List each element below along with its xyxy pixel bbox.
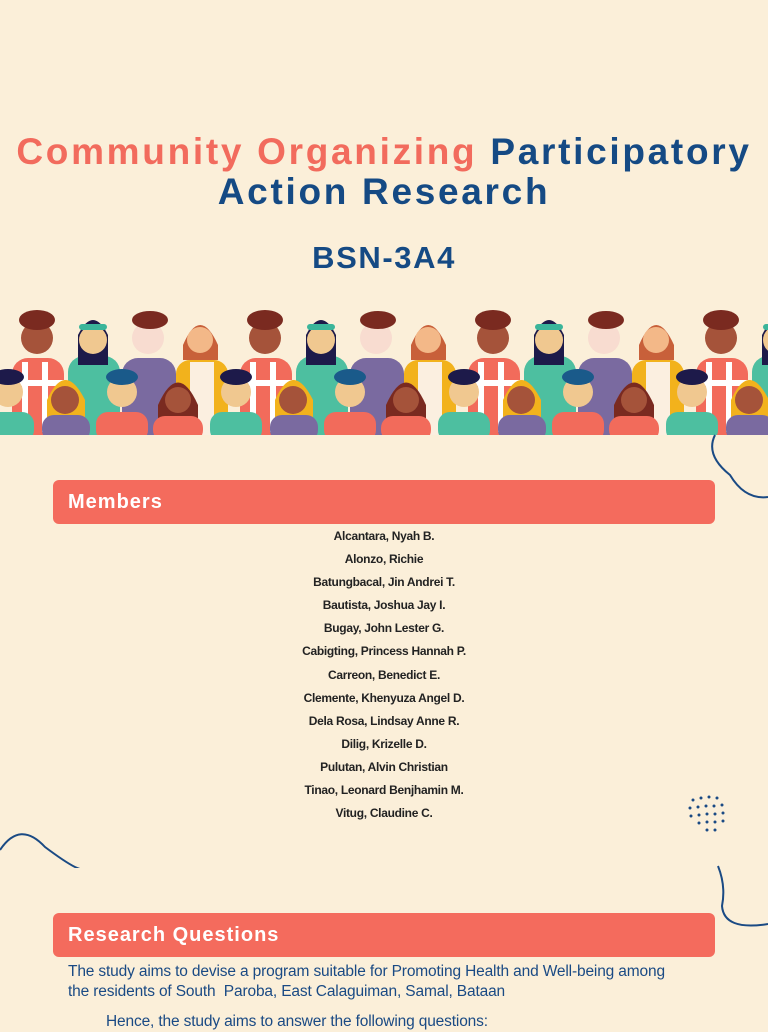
research questions header bar: Research Questions — [68, 924, 279, 946]
research questions text: The study aims to devise a program suitable for Promoting Health and Well-being among — [68, 963, 665, 980]
members list: Tinao, Leonard Benjhamin M. — [304, 783, 464, 797]
members list: Alcantara, Nyah B. — [334, 529, 434, 543]
research questions text: the residents of South Paroba, East Calaguiman, Samal, Bataan — [68, 983, 505, 1000]
decoration: dots — [688, 796, 724, 832]
members list: Alonzo, Richie — [345, 552, 423, 566]
members list: Dela Rosa, Lindsay Anne R. — [309, 714, 459, 728]
members list: Pulutan, Alvin Christian — [320, 760, 448, 774]
title: Community Organizing Participatory — [16, 131, 752, 172]
members list: Vitug, Claudine C. — [335, 806, 433, 820]
illustration: crowd of people — [0, 310, 768, 435]
title: Action Research — [218, 171, 550, 212]
research questions text: Hence, the study aims to answer the following questions: — [106, 1013, 488, 1030]
title — [16, 131, 752, 212]
decoration: wavy line left — [0, 833, 80, 868]
research questions text — [68, 963, 665, 1030]
members list: Cabigting, Princess Hannah P. — [302, 644, 466, 658]
members list: Clemente, Khenyuza Angel D. — [304, 691, 464, 705]
subtitle: class code: BSN-3A4 — [312, 240, 456, 275]
decoration: wavy line right — [717, 866, 768, 926]
members list: Bautista, Joshua Jay I. — [323, 598, 445, 612]
members list: Bugay, John Lester G. — [324, 621, 444, 635]
members list — [302, 529, 466, 820]
decoration: wavy line top right — [711, 434, 768, 498]
research questions header bar — [53, 913, 715, 957]
members header bar — [53, 480, 715, 524]
members header bar: Members — [68, 491, 163, 513]
members list: Batungbacal, Jin Andrei T. — [313, 575, 455, 589]
members list: Carreon, Benedict E. — [328, 668, 440, 682]
members list: Dilig, Krizelle D. — [341, 737, 427, 751]
